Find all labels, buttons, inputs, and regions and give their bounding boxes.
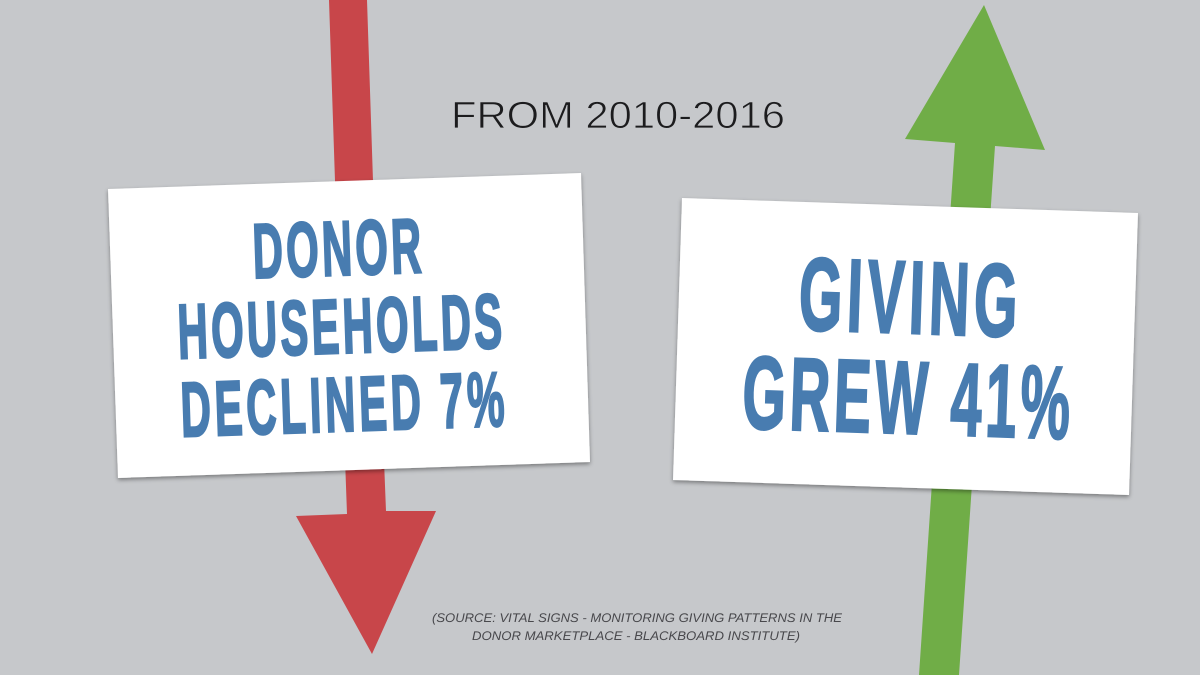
source note <box>432 611 843 643</box>
text: giving grew 41%: GREW 41% <box>741 334 1076 461</box>
title: date range: FROM 2010-2016 <box>451 95 785 137</box>
arrow: green up arrow <box>905 5 1045 675</box>
text: giving grew 41% <box>741 236 1076 461</box>
source note: (SOURCE: VITAL SIGNS - MONITORING GIVING PATTERNS IN THE <box>432 611 843 625</box>
arrow: red down arrow <box>296 0 436 654</box>
text: giving grew 41%: GIVING <box>797 236 1024 359</box>
card background <box>673 198 1138 495</box>
text: donor households declined 7%: DONOR <box>251 203 426 295</box>
text: donor households declined 7% <box>176 203 509 453</box>
panel: giving grew card <box>673 198 1138 495</box>
panel: donor households card <box>108 173 590 478</box>
text: donor households declined 7%: HOUSEHOLDS <box>176 279 507 375</box>
card background <box>108 173 590 478</box>
text: donor households declined 7%: DECLINED 7% <box>179 357 509 453</box>
source note: DONOR MARKETPLACE - BLACKBOARD INSTITUTE) <box>472 629 800 643</box>
